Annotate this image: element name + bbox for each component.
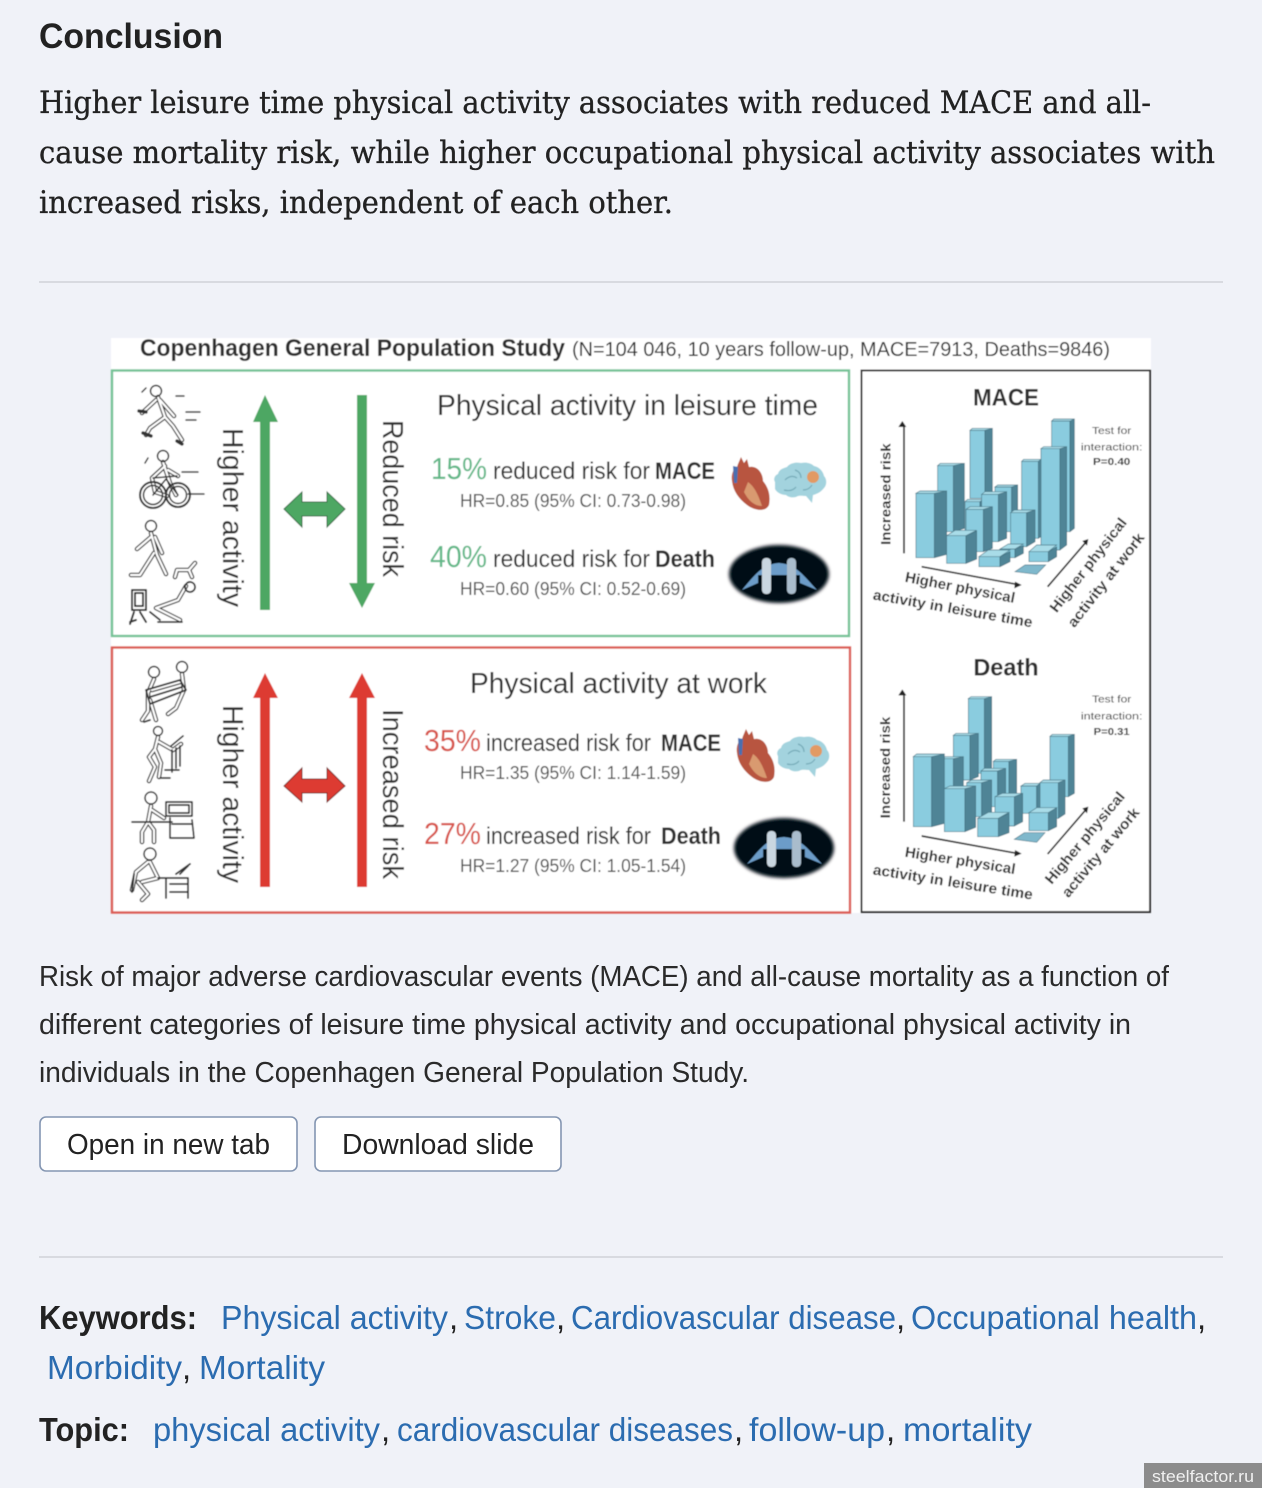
- arrow: reduced risk down: [349, 395, 375, 608]
- topics: ,: [734, 1411, 743, 1448]
- chart: MACE: activity at work: [1065, 530, 1149, 631]
- chart: MACE: activity in leisure time: [872, 588, 1034, 631]
- keywords: ,: [556, 1299, 565, 1336]
- conclusion text: Higher leisure time physical activity associates with reduced MACE and all-: [39, 85, 1151, 121]
- button: open in new tab: [40, 1117, 297, 1171]
- chart: Death: activity at work: [1059, 804, 1144, 901]
- keywords: Morbidity: [47, 1349, 182, 1386]
- chart: MACE: interaction:: [1081, 442, 1142, 453]
- icon: leisure activity sketches: [130, 372, 204, 624]
- label: higher activity: Higher activity: [216, 705, 248, 883]
- figure title: [140, 335, 1110, 362]
- chart: MACE: Higher physical: [904, 570, 1016, 607]
- heading: Conclusion: Conclusion: [39, 17, 223, 56]
- stat: 27% increased death: increased risk for: [486, 823, 651, 850]
- stat: 35% increased MACE: increased risk for: [486, 730, 651, 757]
- button: open in new tab: Open in new tab: [67, 1129, 270, 1161]
- conclusion text: increased risks, independent of each other.: [39, 185, 673, 221]
- topics: ,: [886, 1411, 895, 1448]
- figure caption: different categories of leisure time physical activity and occupational physical activity in: [39, 1009, 1131, 1041]
- stat: 35% increased MACE: [424, 723, 721, 783]
- chart: Death: Test for: [1092, 695, 1132, 706]
- label: reduced risk: Reduced risk: [376, 420, 408, 577]
- icon: death ellipse: [734, 818, 834, 878]
- heading: at work: Physical activity at work: [470, 668, 767, 700]
- stat: 15% reduced MACE: 15%: [431, 451, 487, 486]
- figure caption: individuals in the Copenhagen General Population Study.: [39, 1057, 749, 1089]
- stat: 27% increased death: HR=1.27 (95% CI: 1.05-1.54): [460, 855, 686, 876]
- stat: 15% reduced MACE: reduced risk for: [493, 458, 650, 485]
- topics: mortality: [903, 1411, 1033, 1448]
- topics: cardiovascular diseases: [397, 1411, 733, 1448]
- chart: Death: Higher physical: [1042, 789, 1129, 888]
- keywords: ,: [182, 1349, 191, 1386]
- chart: MACE: [872, 385, 1149, 631]
- topics: follow-up: [749, 1411, 885, 1448]
- chart: MACE: Increased risk: [878, 443, 894, 545]
- chart: MACE: MACE: [973, 385, 1039, 412]
- keywords: Stroke: [464, 1299, 556, 1336]
- stat: 27% increased death: [424, 816, 721, 876]
- stat: 35% increased MACE: 35%: [424, 723, 481, 758]
- stat: 35% increased MACE: MACE: [661, 730, 721, 757]
- icon: heart: [737, 729, 775, 782]
- figure caption: [39, 961, 1170, 1089]
- topics: physical activity: [153, 1411, 380, 1448]
- panel: 3D charts: [862, 370, 1150, 912]
- stat: 35% increased MACE: HR=1.35 (95% CI: 1.14-1.59): [460, 762, 686, 783]
- stat: 40% reduced death: [430, 539, 715, 599]
- icon: brain: [777, 737, 829, 777]
- stat: 40% reduced death: 40%: [430, 539, 487, 574]
- stat: 40% reduced death: HR=0.60 (95% CI: 0.52-0.69): [460, 578, 686, 599]
- icon: death ellipse: [729, 545, 829, 603]
- arrow: two-way interaction: [284, 768, 345, 802]
- chart: MACE: Higher physical: [1047, 515, 1131, 616]
- arrow: higher activity up: [253, 673, 278, 887]
- figure title: Copenhagen General Population Study: [140, 335, 566, 362]
- graphical abstract figure: [111, 335, 1151, 913]
- keywords: Mortality: [199, 1349, 326, 1386]
- button: download slide: [315, 1117, 561, 1171]
- chart: MACE: Test for: [1092, 426, 1132, 437]
- chart: Death: [872, 655, 1144, 904]
- stat: 15% reduced MACE: HR=0.85 (95% CI: 0.73-0.98): [460, 490, 686, 511]
- topics: [39, 1411, 1033, 1448]
- keywords: [39, 1299, 1206, 1386]
- arrow: increased risk up: [349, 673, 375, 887]
- watermark: [1144, 1463, 1262, 1488]
- figure caption: Risk of major adverse cardiovascular events (MACE) and all-cause mortality as a function of: [39, 961, 1170, 993]
- panel: occupational physical activity: [112, 648, 850, 912]
- label: increased risk: Increased risk: [376, 709, 408, 879]
- button: download slide: Download slide: [342, 1129, 534, 1161]
- chart: Death: Death: [973, 655, 1039, 682]
- chart: Death: interaction:: [1081, 711, 1142, 722]
- conclusion text: cause mortality risk, while higher occupational physical activity associates with: [39, 135, 1215, 171]
- label: higher activity: Higher activity: [216, 428, 248, 607]
- heading: leisure time: Physical activity in leisure time: [437, 390, 818, 422]
- stat: 40% reduced death: Death: [655, 546, 715, 573]
- stat: 27% increased death: 27%: [424, 816, 481, 851]
- keywords: Physical activity: [221, 1299, 448, 1336]
- keywords: ,: [449, 1299, 458, 1336]
- chart: Death: activity in leisure time: [872, 862, 1034, 904]
- keywords: Occupational health: [911, 1299, 1197, 1336]
- icon: occupational activity sketches: [132, 662, 194, 900]
- conclusion text: [39, 85, 1215, 221]
- icon: brain: [774, 463, 826, 503]
- keywords: ,: [896, 1299, 905, 1336]
- keywords: Keywords:: [39, 1299, 197, 1336]
- keywords: ,: [1197, 1299, 1206, 1336]
- stat: 15% reduced MACE: [431, 451, 715, 511]
- chart: Death: Increased risk: [877, 716, 893, 818]
- icon: heart: [732, 457, 770, 510]
- keywords: Cardiovascular disease: [571, 1299, 896, 1336]
- arrow: higher activity up: [253, 395, 278, 610]
- watermark: steelfactor.ru: [1152, 1467, 1254, 1486]
- topics: ,: [381, 1411, 390, 1448]
- panel: leisure time physical activity: [112, 370, 849, 636]
- chart: MACE: P=0.40: [1093, 457, 1131, 468]
- figure title: (N=104 046, 10 years follow-up, MACE=7913, Deaths=9846): [572, 339, 1110, 361]
- chart: Death: Higher physical: [904, 845, 1017, 878]
- arrow: two-way interaction: [284, 492, 345, 527]
- chart: Death: P=0.31: [1094, 727, 1130, 738]
- stat: 40% reduced death: reduced risk for: [493, 546, 650, 573]
- stat: 27% increased death: Death: [661, 823, 721, 850]
- topics: Topic:: [39, 1411, 129, 1448]
- stat: 15% reduced MACE: MACE: [655, 458, 715, 485]
